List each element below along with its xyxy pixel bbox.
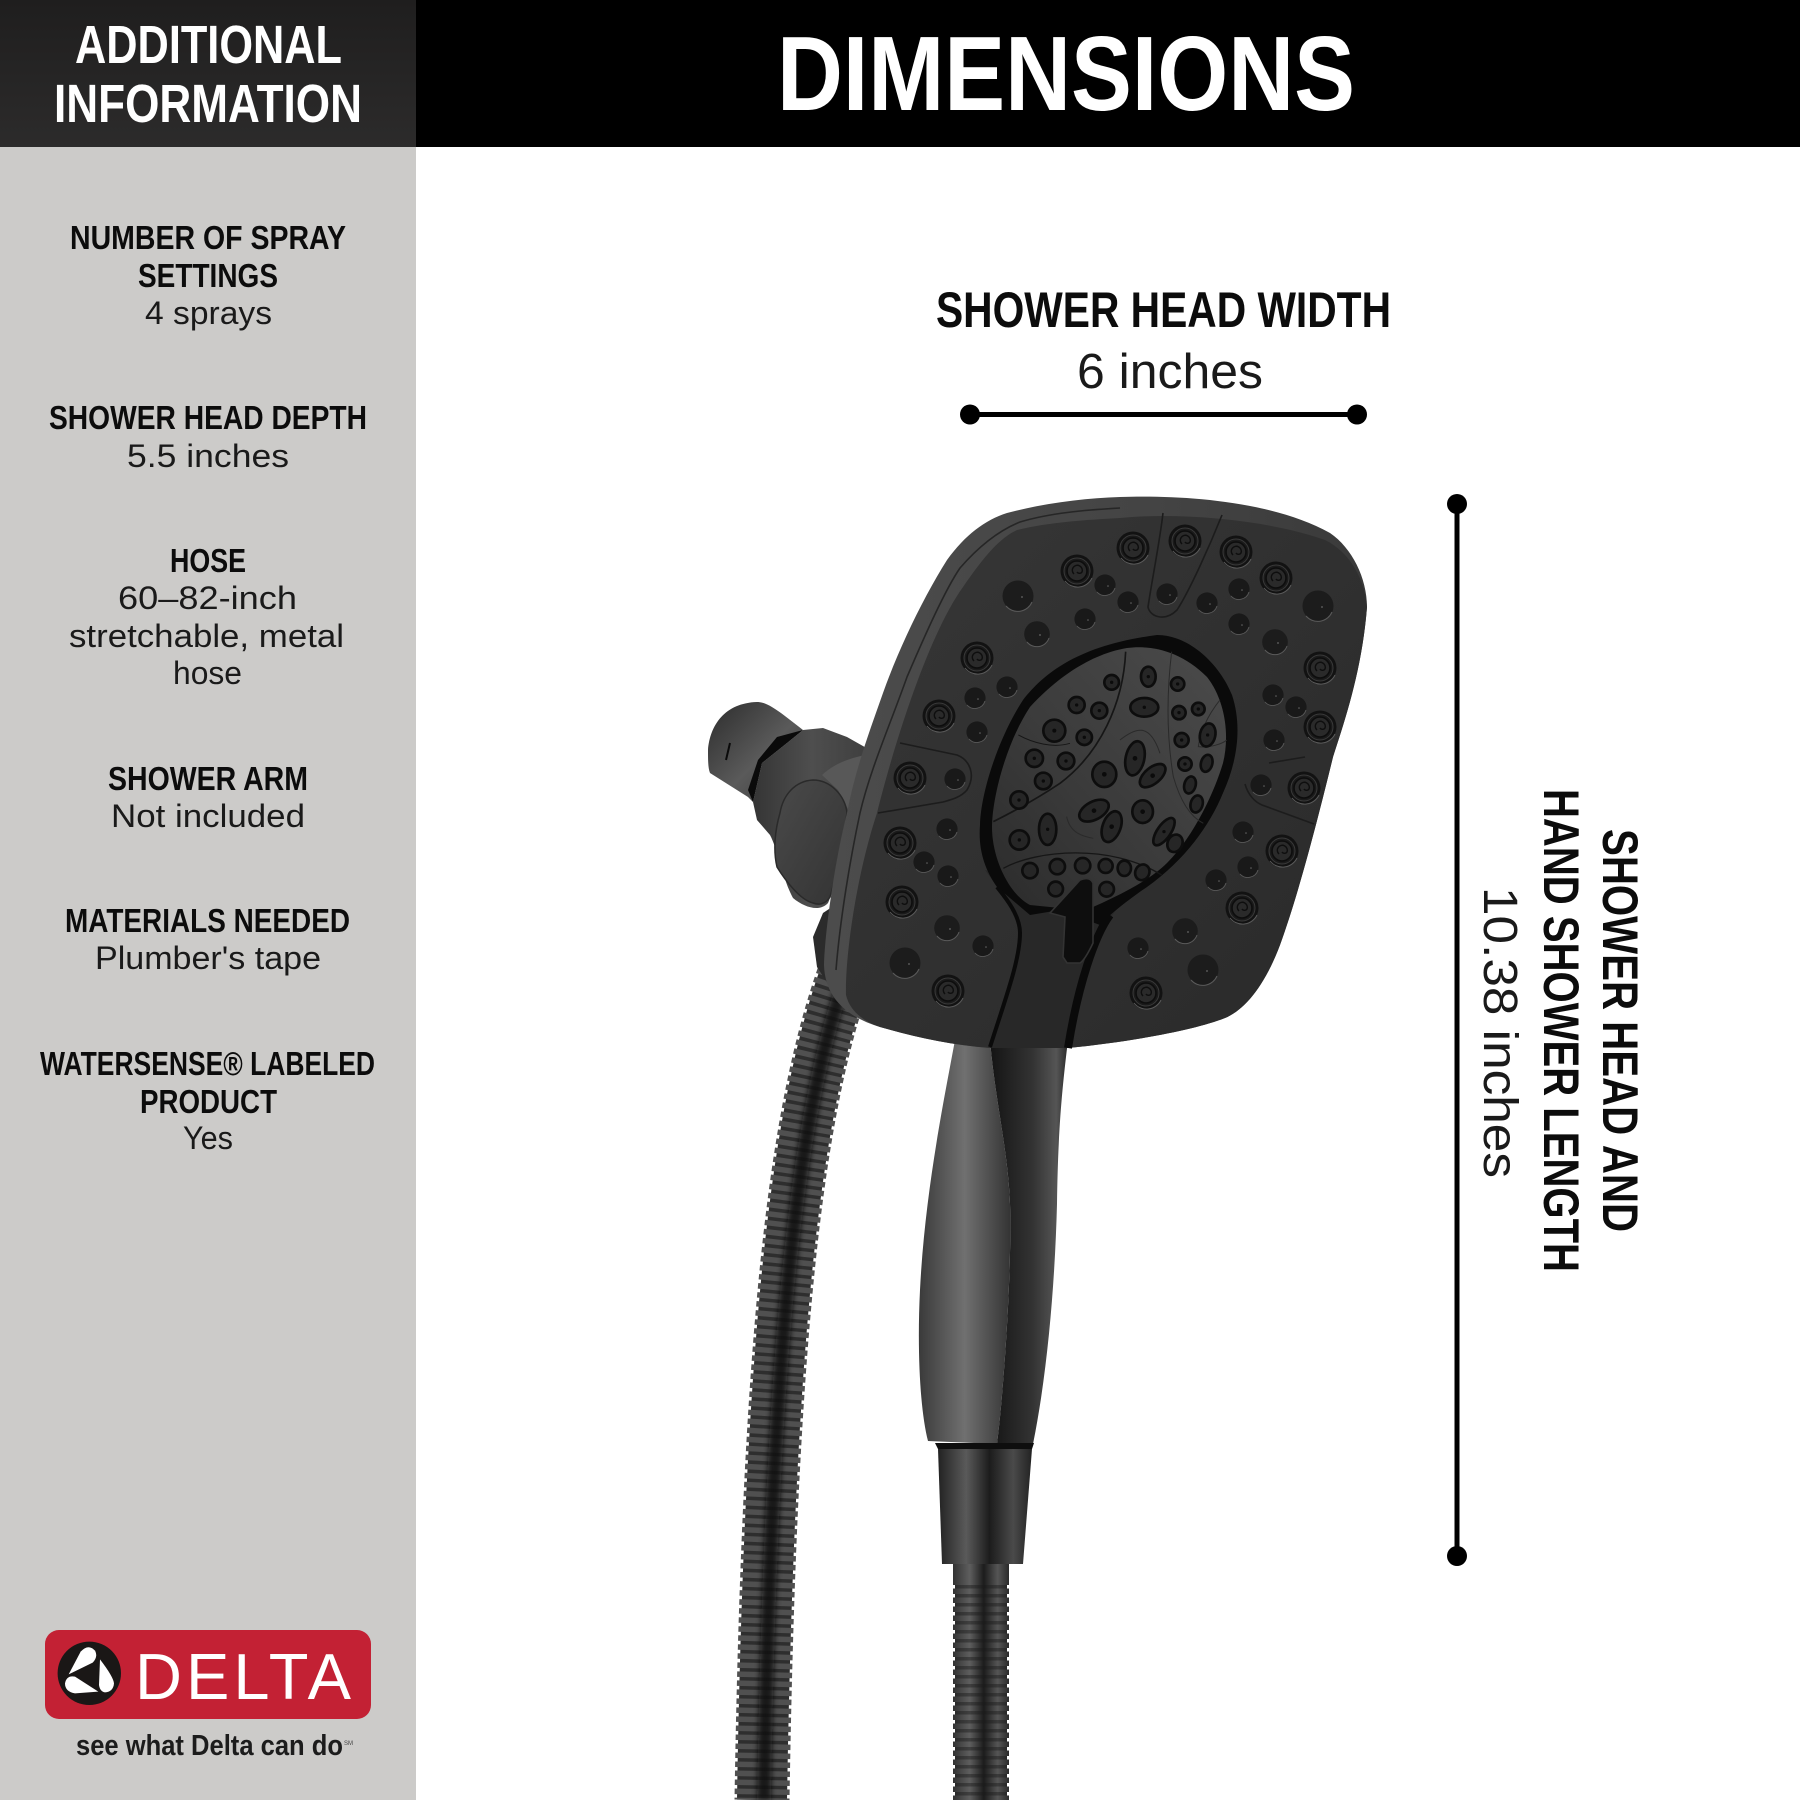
dimension: shower head width [936, 282, 1391, 424]
spec: shower head depth [49, 399, 367, 474]
spec: watersense labeled product: WATERSENSE® LABELED [40, 1045, 375, 1082]
spec: materials needed: MATERIALS NEEDED [65, 902, 350, 939]
product: shower head and hand shower [708, 497, 1367, 1800]
center spray disc [980, 635, 1238, 925]
spec: hose [69, 542, 344, 691]
outer spray nozzles [884, 524, 1336, 1010]
dimension: shower head and hand shower length [1447, 494, 1648, 1566]
panel: additional information sidebar [0, 0, 416, 1800]
spec: number of spray settings [70, 219, 346, 331]
spec: watersense labeled product: PRODUCT [140, 1083, 277, 1120]
hose: left coil [762, 960, 852, 1800]
spec: shower head depth: SHOWER HEAD DEPTH [49, 399, 367, 436]
spec: hose: stretchable, metal [69, 618, 344, 654]
spec: shower arm: Not included [111, 798, 305, 834]
spec: hose: 60–82-inch [118, 580, 297, 616]
spec: shower arm [108, 760, 308, 834]
spec: shower head depth: 5.5 inches [127, 438, 289, 474]
hose: right section [953, 1560, 1009, 1800]
header: additional information [0, 0, 416, 147]
dimension: shower head width: 6 inches [1077, 345, 1263, 399]
spec: number of spray settings: NUMBER OF SPRAY [70, 219, 346, 256]
spec: hose: hose [173, 655, 242, 691]
header: additional information: ADDITIONAL [75, 15, 342, 75]
dimension: shower head and hand shower length: 10.38 inches [1473, 887, 1526, 1178]
shower head face [824, 497, 1367, 1048]
dimension: shower head and hand shower length: HAND SHOWER LENGTH [1533, 789, 1589, 1272]
spec: materials needed: Plumber's tape [95, 940, 321, 976]
spec: number of spray settings: SETTINGS [138, 257, 278, 294]
swivel arm mount [708, 702, 870, 1010]
spec: number of spray settings: 4 sprays [145, 295, 272, 331]
handle neck [985, 870, 1120, 1048]
spec: shower arm: SHOWER ARM [108, 760, 308, 797]
logo: Delta: DELTA [135, 1640, 352, 1713]
spec: watersense labeled product: Yes [183, 1120, 233, 1156]
logo: Delta: SM [344, 1741, 353, 1747]
spec: hose: HOSE [170, 542, 246, 579]
logo: Delta: see what Delta can do [76, 1730, 343, 1762]
header: additional information: INFORMATION [54, 74, 362, 134]
face panel seams [878, 513, 1314, 824]
spec: materials needed [65, 902, 350, 976]
dimension: shower head width: SHOWER HEAD WIDTH [936, 282, 1391, 338]
release clip [1050, 879, 1093, 963]
header: dimensions: DIMENSIONS [777, 15, 1355, 133]
spec: watersense labeled product [40, 1045, 375, 1156]
logo: Delta [45, 1630, 371, 1762]
handle and collar [919, 1040, 1068, 1564]
face split grooves [990, 887, 1110, 1048]
dimension: shower head and hand shower length: SHOWER HEAD AND [1592, 829, 1648, 1232]
header: dimensions [416, 0, 1800, 147]
